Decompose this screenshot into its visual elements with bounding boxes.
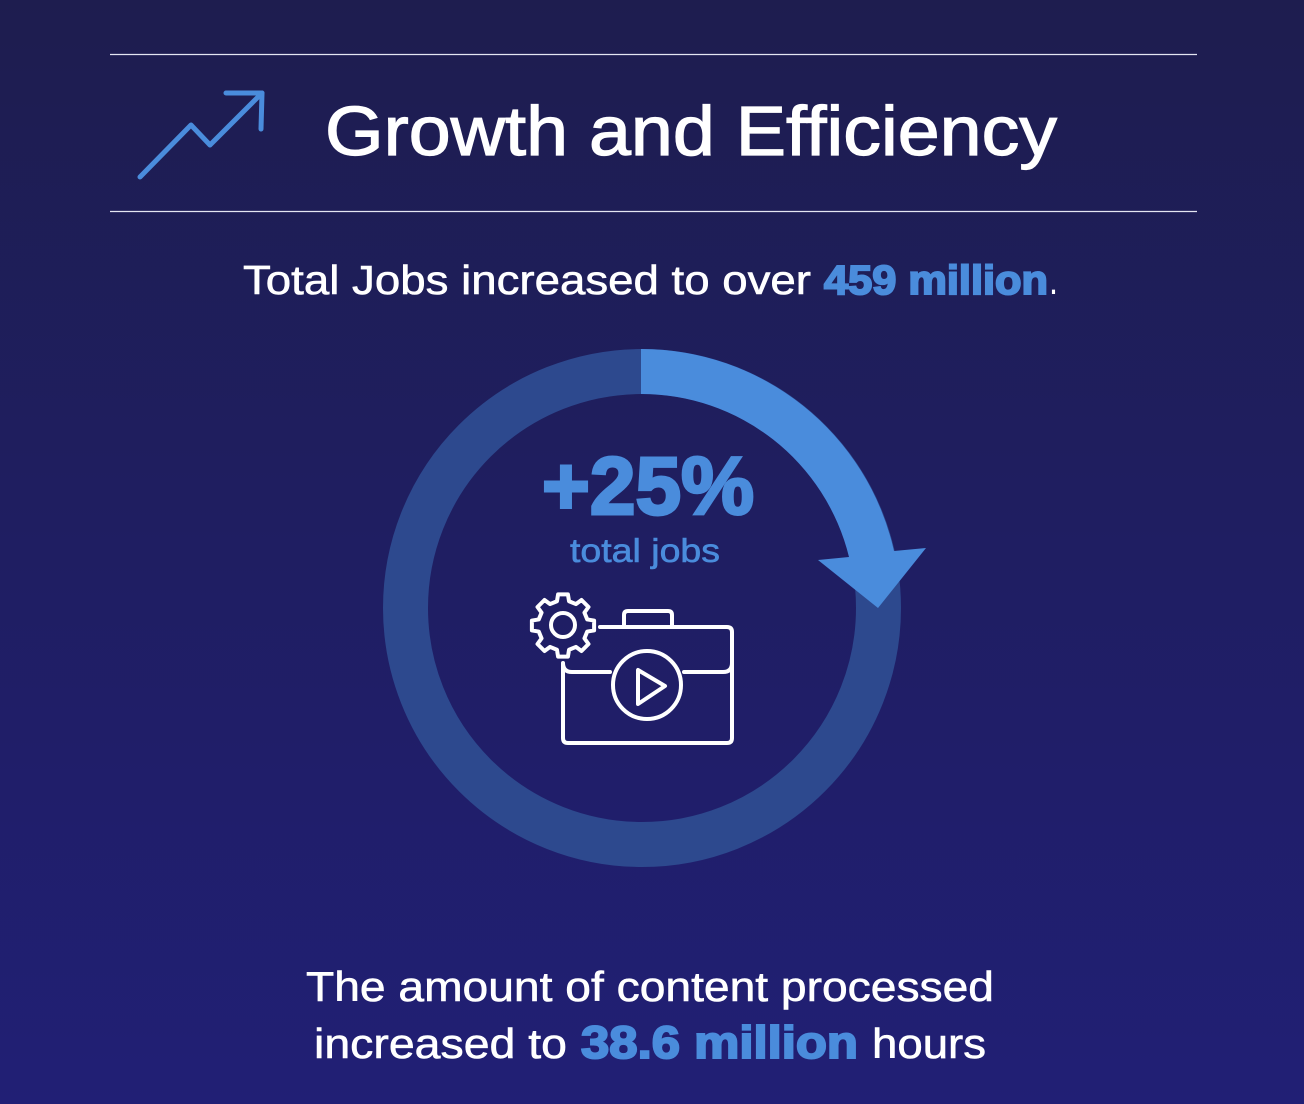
text: content processed statement	[306, 963, 994, 1068]
text: total jobs statement: .	[1049, 257, 1058, 303]
text: content processed statement: The amount of content processed	[306, 963, 994, 1010]
stat: +25%: +25%	[542, 441, 754, 532]
text: total jobs statement	[243, 257, 1058, 303]
ring track	[406, 372, 878, 844]
title: Growth and Efficiency	[325, 92, 1057, 170]
ring chart: 25 percent increase	[406, 349, 926, 844]
stat label: total jobs: total jobs	[570, 532, 720, 569]
text: content processed statement: increased to	[314, 1020, 567, 1067]
text: content processed statement: hours	[872, 1020, 986, 1067]
icon: briefcase with gear and play button	[532, 594, 732, 743]
ring progress arrow	[641, 349, 926, 608]
text: content processed statement: 38.6 million	[581, 1017, 858, 1068]
text: total jobs statement: 459 million	[824, 257, 1048, 303]
text: total jobs statement: Total Jobs increased to over	[243, 257, 811, 303]
icon: growth arrow	[140, 93, 262, 177]
